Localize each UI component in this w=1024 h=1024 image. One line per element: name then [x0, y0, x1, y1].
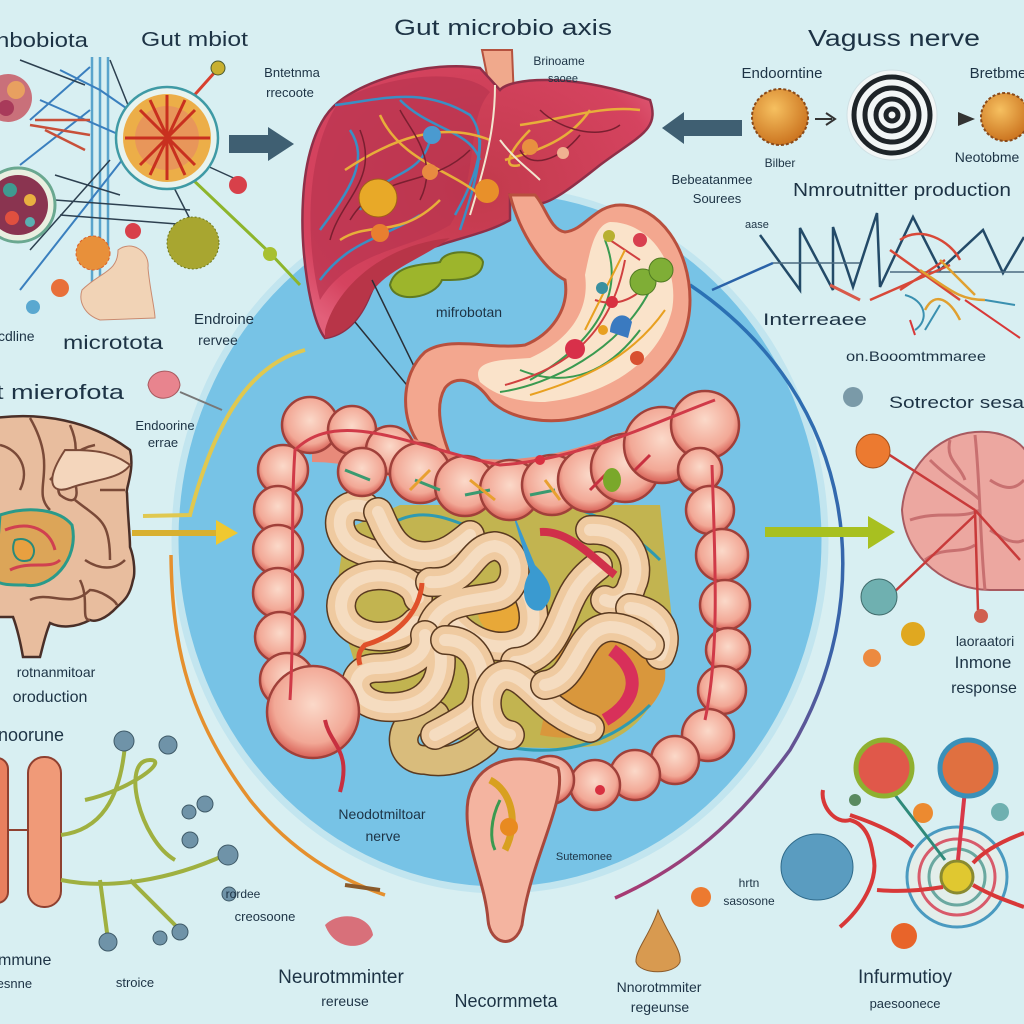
icon: small red ball	[974, 609, 988, 623]
icon: pink drop	[148, 371, 222, 410]
label: bronterna: Bntetnma	[264, 65, 321, 80]
coil 4	[430, 546, 515, 625]
icon: microbe blue	[940, 740, 996, 796]
label: necormmeta: Necormmeta	[454, 991, 558, 1011]
coil 6	[515, 566, 598, 662]
rectum vessel	[492, 800, 500, 850]
label: inflammatory: Infurmutioy	[858, 967, 952, 988]
icon: blue nodule	[610, 315, 632, 338]
arrow: yellow left	[132, 520, 238, 545]
line: yellow curve	[143, 350, 305, 516]
label: inflammatory: laoraatori	[956, 633, 1014, 649]
coil 2	[378, 512, 470, 556]
arrow: green right	[765, 516, 895, 549]
label: bottom microbiota: microtota	[63, 333, 164, 354]
label: production: oroduction	[13, 689, 87, 706]
icon: orange cluster	[76, 236, 110, 270]
label: neoutnitter nerve: Neodotmiltoar	[338, 806, 426, 822]
icon: yellow nodule	[359, 179, 397, 217]
label: microbiotan: mifrobotan	[436, 304, 502, 320]
icon: endocrine ball	[752, 89, 808, 145]
icon: small nodules	[596, 230, 647, 365]
icon: teal ball	[861, 579, 897, 615]
label: ondootmmrance: on.Booomtmmaree	[846, 348, 986, 364]
label: erraa: errae	[148, 435, 178, 450]
icon: blue dot	[26, 300, 40, 314]
icon: red colon spot	[595, 785, 605, 795]
icon: small pale	[557, 147, 569, 159]
label: biber: Bilber	[765, 156, 795, 170]
icon: green spot	[603, 468, 621, 492]
transverse colon contents	[345, 455, 650, 500]
label: receptors: rordee	[226, 887, 261, 901]
esophagus	[482, 50, 514, 100]
colon base tube	[312, 420, 700, 482]
label: vaguss nerve: Vaguss nerve	[808, 25, 980, 51]
stomach	[406, 195, 690, 455]
icon: red dot	[229, 176, 247, 194]
chart: zigzag	[712, 213, 1024, 338]
icon: orange ball	[856, 434, 890, 468]
icon: green node	[263, 247, 277, 261]
icon: drop gold	[636, 910, 680, 972]
coil 7	[590, 530, 635, 602]
icon: olive sphere	[167, 217, 219, 269]
panel: brain right	[843, 387, 1024, 667]
icon: red dot small	[125, 223, 141, 239]
colored centre core	[13, 539, 34, 561]
rectum	[467, 759, 560, 941]
label: nerve: nerve	[365, 828, 401, 844]
coil 1	[340, 506, 420, 559]
coil 13	[404, 715, 485, 761]
icon: red nodule	[565, 339, 585, 359]
icon: orange tile	[51, 279, 69, 297]
icon: blue mesh	[781, 834, 853, 900]
liver	[302, 66, 653, 338]
label: endocrine: Endoorntine	[742, 65, 822, 82]
panel: brain left	[0, 416, 134, 657]
coil 9	[545, 627, 650, 685]
label: brainne: Brinoame	[533, 54, 585, 68]
appendix	[325, 720, 344, 792]
icon: blue nodule	[423, 126, 441, 144]
coil 3 ring	[341, 575, 418, 637]
icon: green nodules	[630, 258, 673, 295]
coil 8	[630, 608, 664, 655]
label: behaviour: Bebeatanmee	[672, 172, 752, 187]
central blue circle	[175, 190, 825, 890]
icon: pink blob	[325, 916, 373, 946]
icon: microbe circle large	[116, 87, 218, 189]
label: endrotine nerve: Endroine	[194, 311, 254, 328]
small intestine coils	[340, 506, 664, 761]
coil 12	[435, 640, 483, 735]
arrow: left right	[662, 112, 742, 144]
label: source: Sourees	[693, 191, 742, 206]
panel: top left microbiota network	[0, 57, 300, 320]
panel: bottom right immune	[691, 740, 1024, 949]
icon: gold dot	[211, 61, 225, 75]
gallbladder	[390, 252, 483, 297]
label: neurotransmitter production: Nmroutnitter production	[793, 180, 1011, 200]
arrow: small	[815, 113, 835, 125]
arc lower left	[171, 555, 385, 895]
icon: blue drop	[510, 505, 551, 611]
colon haustra	[253, 391, 750, 810]
label: receuse: rereuse	[321, 993, 369, 1009]
nerve end left	[345, 885, 380, 890]
title: Gut microbio axis	[394, 15, 612, 40]
label: cesesone: creosoone	[235, 909, 295, 924]
label: small top: aase	[745, 219, 769, 231]
label: sanse: sasosone	[723, 894, 775, 908]
rectum contents	[490, 780, 512, 850]
label: neotobme: Neotobme	[955, 149, 1020, 165]
label: nerve small: rervee	[198, 332, 238, 348]
icon: orange centre	[422, 164, 438, 180]
pointer lines	[355, 280, 428, 395]
icon: grey ball	[843, 387, 863, 407]
icon: yellow ball	[901, 622, 925, 646]
small intestine backdrop	[335, 495, 672, 750]
icon: orange right	[522, 139, 538, 155]
colon vessel	[290, 400, 715, 720]
label: sterice: stroice	[116, 975, 154, 990]
upper gyrus	[52, 450, 130, 490]
label: bottom center small: Sutemonee	[556, 851, 612, 863]
label: saee: saoee	[548, 73, 578, 85]
icon: microbe green	[856, 740, 912, 796]
label: immune: Inmone	[955, 653, 1011, 672]
icon: red spot	[535, 455, 545, 465]
icon: orange small	[371, 224, 389, 242]
label: neurotmmiter response: Nnorotmmiter	[617, 979, 702, 995]
icon: target nest	[907, 827, 1007, 927]
vagus arc right	[615, 285, 843, 898]
icon: microbe circle left	[0, 168, 55, 242]
label: endocrine erraa: Endoorine	[135, 418, 195, 433]
label: neurotransmitter production: rotnanmitoar	[17, 664, 96, 680]
icon: orange spot	[500, 818, 518, 836]
icon: microbe top left	[0, 74, 32, 122]
colon	[253, 391, 750, 941]
panel: bottom left capsules and network	[0, 731, 238, 951]
colored centre lines	[5, 526, 60, 570]
icon: target rings	[847, 70, 937, 160]
icon: right ball	[981, 93, 1024, 141]
icon: tissue cluster	[81, 246, 155, 320]
icon: balls	[99, 731, 238, 951]
label: neurotransmitter reruse: Neurotmminter	[278, 967, 404, 988]
label: receve: rrecoote	[266, 85, 314, 100]
label: gut mbiot: Gut mbiot	[141, 29, 249, 51]
label: response: response	[951, 680, 1017, 697]
icon: orange nodule	[475, 179, 499, 203]
arrow: small right	[958, 112, 975, 126]
label: hitn: hrtn	[739, 876, 759, 890]
coil 11	[356, 635, 441, 707]
icon: small orange ball	[863, 649, 881, 667]
coil 10	[487, 675, 590, 735]
arrow: dark right	[229, 127, 294, 161]
icon: small balls	[691, 794, 1009, 949]
label: interresse: Interreaee	[763, 310, 867, 329]
label: regense: regeunse	[631, 999, 689, 1015]
coil 5	[452, 592, 534, 647]
red vessels	[540, 532, 615, 575]
label: pessconce: paesoonece	[870, 996, 940, 1011]
colored centre	[0, 510, 73, 586]
label: sstrector: Sotrector sesa	[889, 393, 1024, 412]
